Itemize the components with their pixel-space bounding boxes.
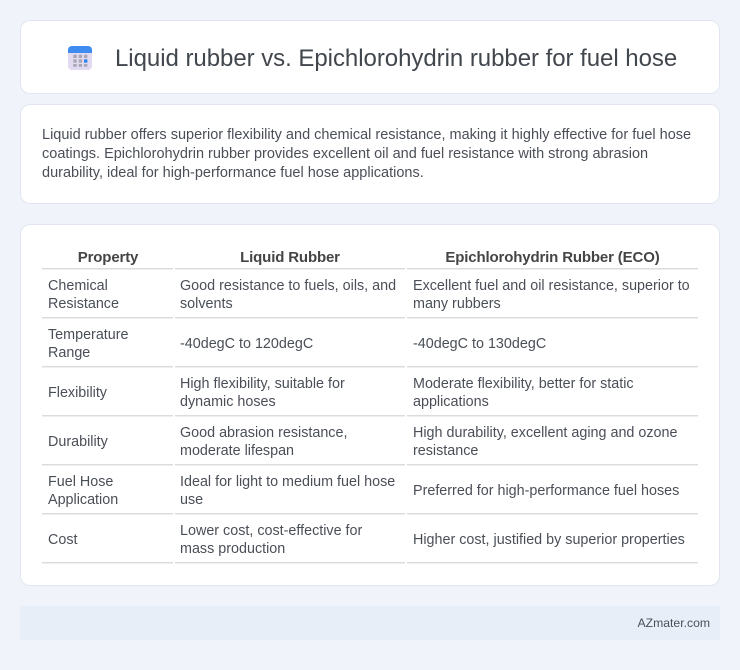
table row: chemical resistance xyxy=(42,278,698,319)
footer bar xyxy=(20,606,720,640)
table row: durability: resistance xyxy=(413,443,478,459)
table row: durability: High durability, excellent aging and ozone xyxy=(413,425,677,441)
table row: fuel hose application xyxy=(42,474,698,515)
footer source text: AZmater.com xyxy=(638,616,710,630)
table row: chemical resistance: solvents xyxy=(180,296,233,312)
table row: flexibility: Flexibility xyxy=(48,385,107,401)
title: Liquid rubber vs. Epichlorohydrin rubber for fuel hose xyxy=(115,45,677,72)
description text: coatings. Epichlorohydrin rubber provides excellent oil and fuel resistance with strong abrasion xyxy=(42,146,648,162)
table row: fuel hose application: Application xyxy=(48,492,118,508)
table row: temperature range: Range xyxy=(48,345,90,361)
icon: calendar grid xyxy=(68,46,92,70)
description text: durability, ideal for high-performance fuel hose applications. xyxy=(42,165,424,181)
table row: fuel hose application: Fuel Hose xyxy=(48,474,113,490)
table row: durability: Good abrasion resistance, xyxy=(180,425,347,441)
table row: cost: Higher cost, justified by superior properties xyxy=(413,532,685,548)
table row: temperature range: Temperature xyxy=(48,327,129,343)
table row: durability: moderate lifespan xyxy=(180,443,294,459)
table header row xyxy=(42,249,698,270)
table row: fuel hose application: use xyxy=(180,492,203,508)
panel: title header xyxy=(20,20,720,94)
table header row: Liquid Rubber xyxy=(240,249,340,266)
table row: flexibility: applications xyxy=(413,394,489,410)
table row: temperature range: -40degC to 130degC xyxy=(413,336,546,352)
table header row: Epichlorohydrin Rubber (ECO) xyxy=(445,249,660,266)
table row: chemical resistance: Chemical xyxy=(48,278,108,294)
table row: flexibility: High flexibility, suitable for xyxy=(180,376,345,392)
table row: chemical resistance: Resistance xyxy=(48,296,119,312)
table row: cost: Cost xyxy=(48,532,78,548)
table row: chemical resistance: many rubbers xyxy=(413,296,501,312)
panel: comparison table xyxy=(20,224,720,586)
table row: durability xyxy=(42,425,698,466)
table row: temperature range xyxy=(42,327,698,368)
panel: description xyxy=(20,104,720,204)
description text xyxy=(42,127,691,181)
table row: chemical resistance: Excellent fuel and oil resistance, superior to xyxy=(413,278,690,294)
table row: flexibility xyxy=(42,376,698,417)
description text: Liquid rubber offers superior flexibility and chemical resistance, making it highly effective for fuel hose xyxy=(42,127,691,143)
table row: temperature range: -40degC to 120degC xyxy=(180,336,313,352)
table row: fuel hose application: Preferred for high-performance fuel hoses xyxy=(413,483,679,499)
table row: chemical resistance: Good resistance to fuels, oils, and xyxy=(180,278,396,294)
table header row: Property xyxy=(78,249,138,266)
table row: flexibility: dynamic hoses xyxy=(180,394,276,410)
table row: cost: Lower cost, cost-effective for xyxy=(180,523,362,539)
table row: fuel hose application: Ideal for light to medium fuel hose xyxy=(180,474,395,490)
table row: durability: Durability xyxy=(48,434,108,450)
table row: cost: mass production xyxy=(180,541,285,557)
table row: cost xyxy=(42,523,698,564)
table row: flexibility: Moderate flexibility, better for static xyxy=(413,376,634,392)
